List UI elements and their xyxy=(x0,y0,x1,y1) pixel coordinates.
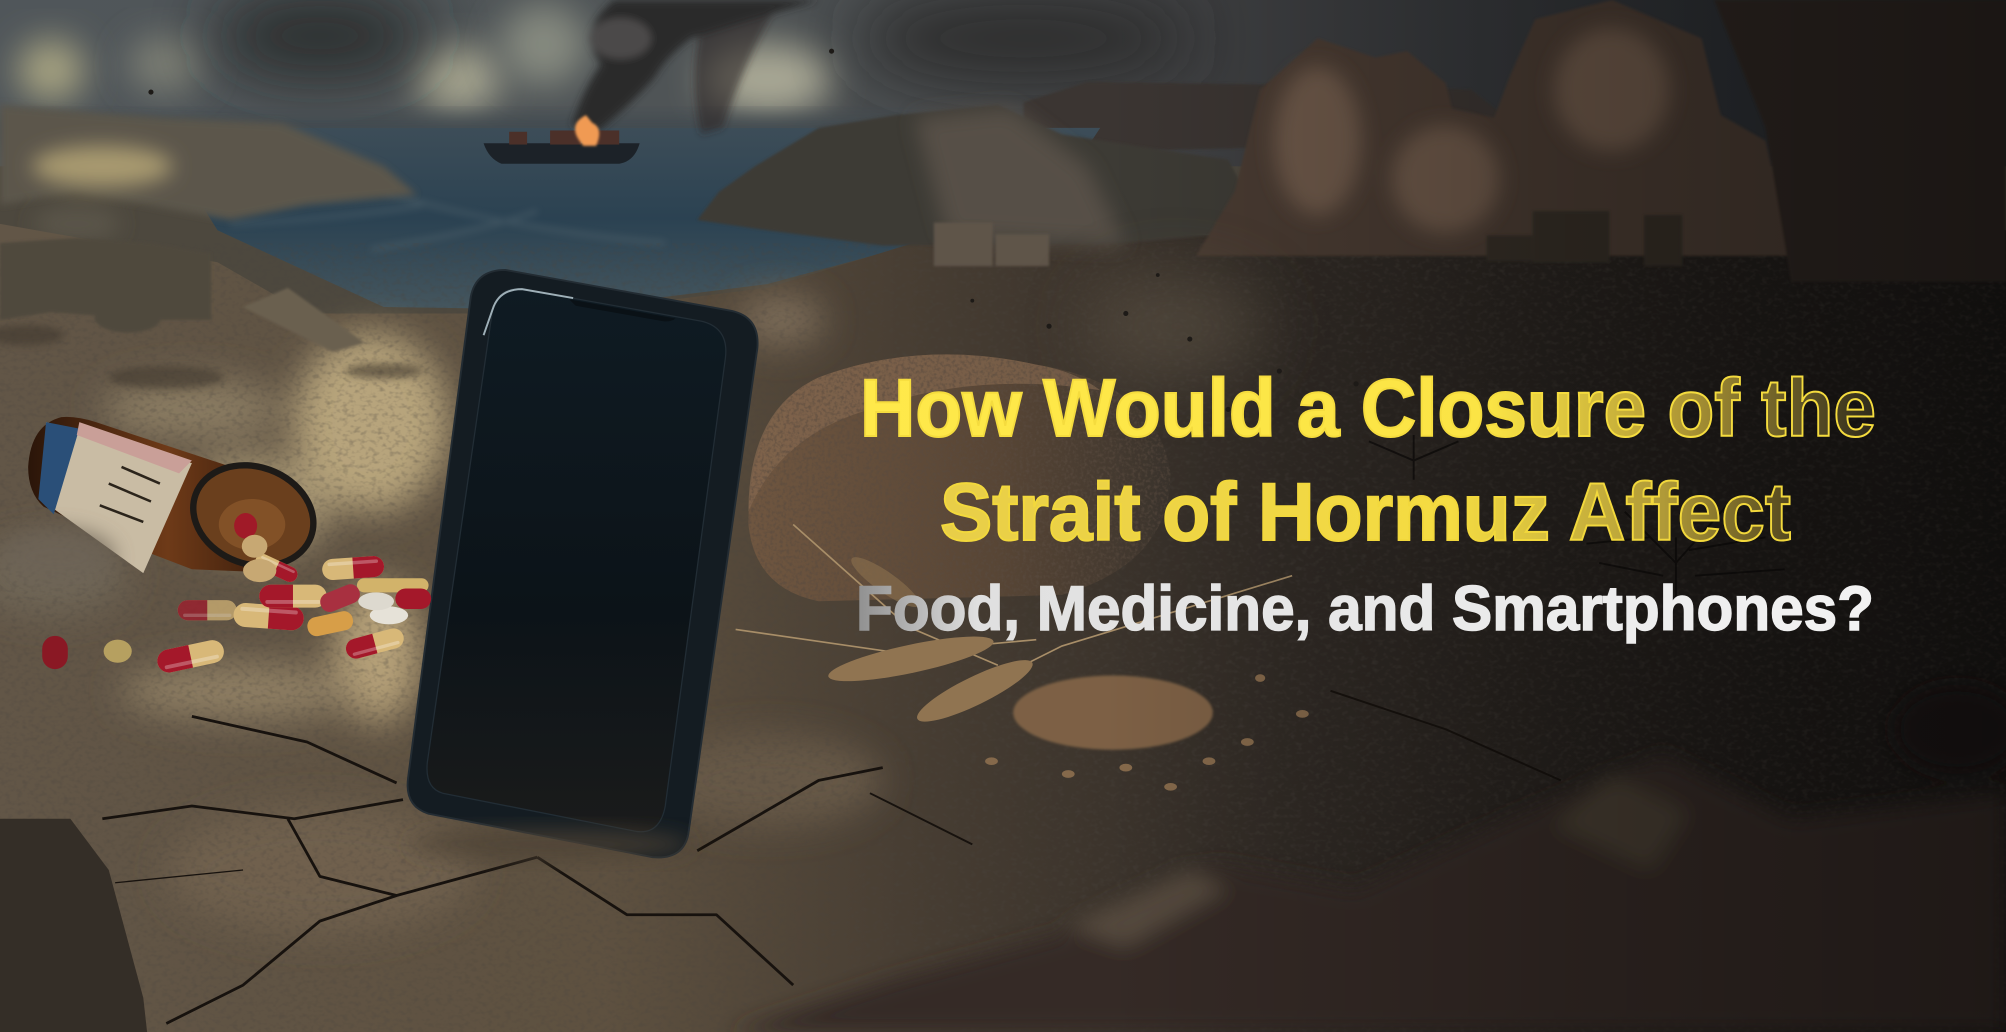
dead shrubs xyxy=(1369,435,1785,601)
label xyxy=(38,422,192,573)
notch xyxy=(569,299,675,321)
ruins left xyxy=(0,238,365,352)
smoke plume xyxy=(572,0,819,134)
title xyxy=(856,363,1876,644)
medicine bottle xyxy=(28,417,328,582)
rock highlights xyxy=(1274,28,1670,233)
screen highlight xyxy=(484,289,573,335)
ground xyxy=(0,224,2006,1032)
burning ship xyxy=(484,0,819,164)
wheat ears xyxy=(825,550,1039,732)
cracked earth lines xyxy=(102,691,1561,1023)
rock-cut buildings xyxy=(1487,211,1682,266)
grain pile xyxy=(1013,675,1213,750)
phone body xyxy=(408,270,758,857)
dust by bottle xyxy=(0,528,115,585)
sandy light patches xyxy=(0,294,883,934)
scattered grain xyxy=(985,674,1309,791)
dust at phone base xyxy=(409,829,691,860)
distant hills right xyxy=(1023,82,1535,154)
sky with smoke clouds xyxy=(0,0,2006,166)
bottle body xyxy=(28,417,307,573)
containers xyxy=(509,130,619,145)
water of the strait xyxy=(154,128,1100,310)
left hills xyxy=(0,105,417,220)
dust on left hills xyxy=(32,146,173,242)
smartphone xyxy=(408,270,758,857)
ground speckle grain xyxy=(0,243,2006,1032)
foreground mounds bottom-right xyxy=(729,684,2006,1032)
flames xyxy=(575,115,599,146)
title line 2: Strait of Hormuz Affect xyxy=(940,467,1791,558)
hull xyxy=(484,143,640,164)
headland xyxy=(697,105,1267,246)
title line 1: How Would a Closure of the xyxy=(860,363,1876,454)
subtitle line: Food, Medicine, and Smartphones? xyxy=(856,574,1874,644)
wheat stalks and grain xyxy=(736,525,1309,791)
pill inside mouth xyxy=(219,499,285,550)
dust around bread xyxy=(1087,275,1267,377)
headland lit face xyxy=(915,107,1126,246)
fort xyxy=(934,223,1049,266)
wheat stems xyxy=(736,525,1292,716)
rubble patches xyxy=(0,325,422,389)
phone screen xyxy=(427,289,726,832)
spilled pills xyxy=(42,513,431,675)
ship wake xyxy=(230,192,665,249)
sandstone rock towers xyxy=(1196,0,2006,281)
foreground rubble bottom-left xyxy=(0,819,147,1032)
flying debris specks xyxy=(148,49,1359,412)
bottle mouth xyxy=(179,449,328,582)
bread loaf xyxy=(748,354,1171,601)
